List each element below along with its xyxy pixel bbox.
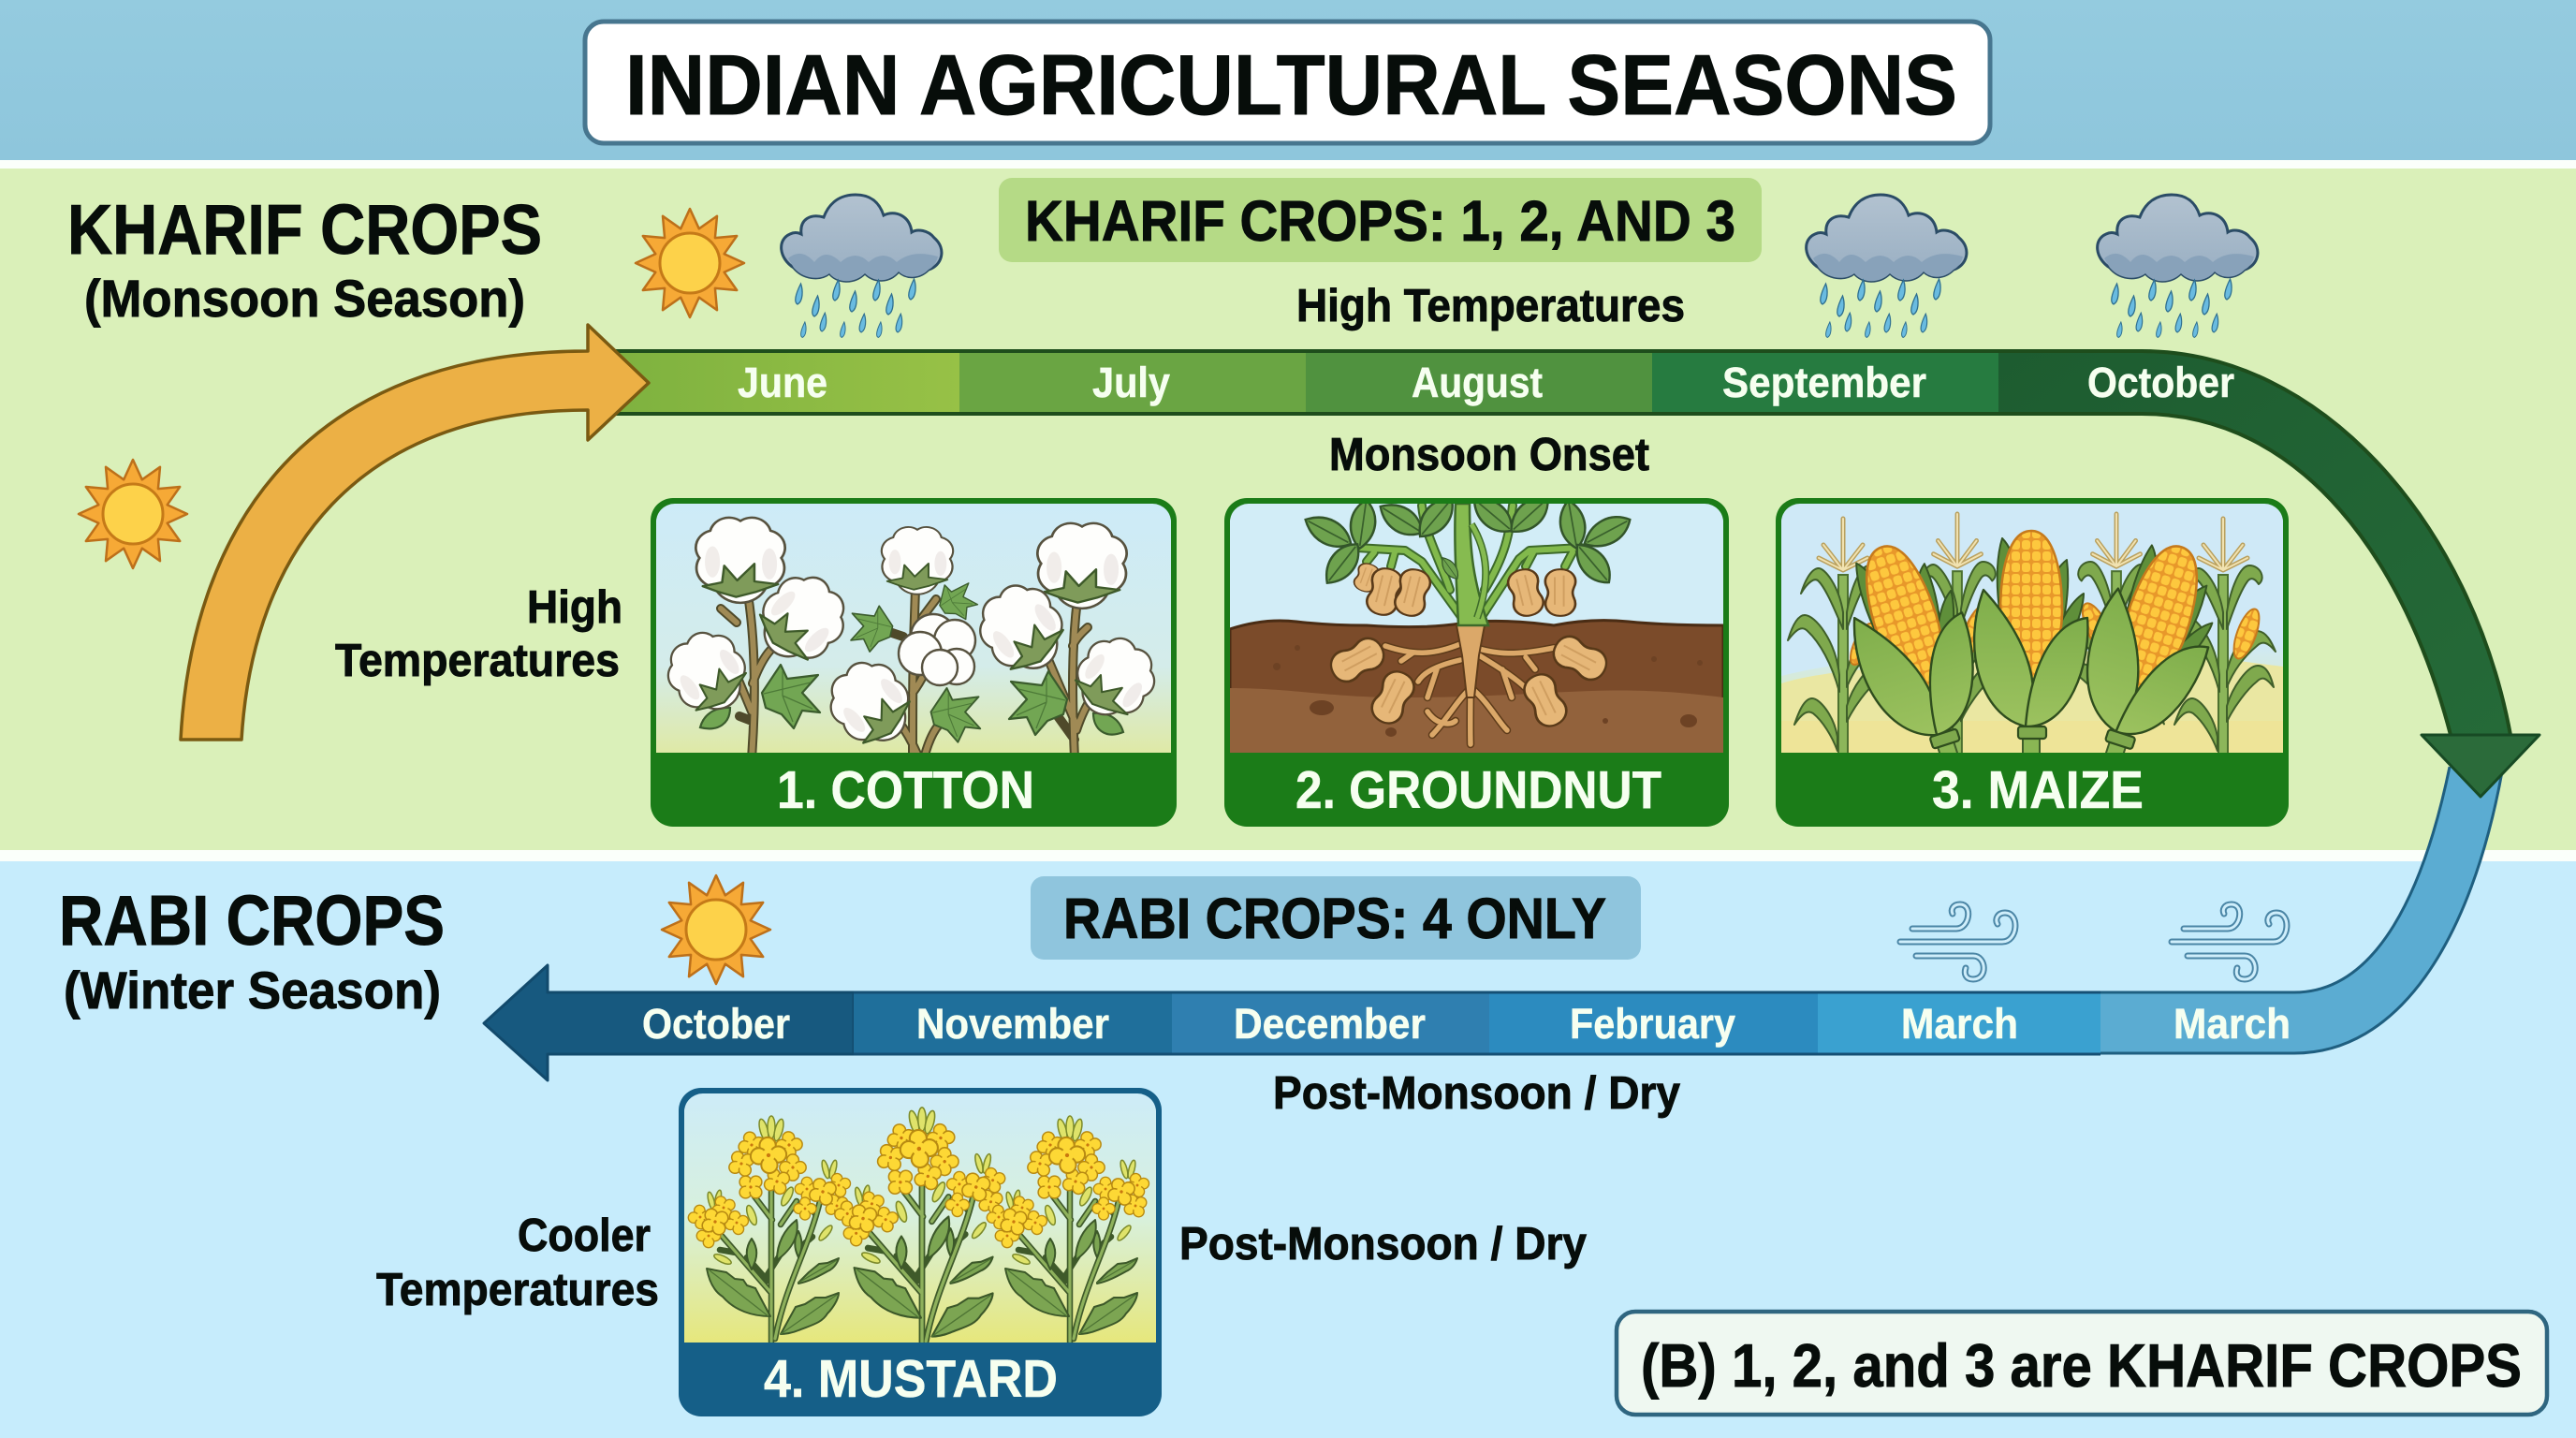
illustration: groundnut plant and roots <box>1230 490 1723 753</box>
kharif timeline band <box>599 351 2510 735</box>
illustration: mustard plants <box>686 1108 1151 1344</box>
kharif heading: (Monsoon Season) <box>84 269 525 328</box>
rabi timeline band: March <box>2174 1000 2291 1048</box>
rabi timeline band: February <box>1570 1000 1735 1048</box>
arrow: green head pointing to rabi <box>2422 735 2539 797</box>
rabi summary pill: RABI CROPS: 4 ONLY <box>1063 887 1606 950</box>
kharif heading: KHARIF CROPS <box>67 190 542 269</box>
kharif timeline band: June <box>738 359 827 406</box>
rabi timeline band: March <box>1901 1000 2018 1048</box>
kharif timeline band: July <box>1092 359 1170 406</box>
icon: rain cloud september <box>1807 195 1967 337</box>
icon: sun above october <box>662 875 770 984</box>
kharif heading <box>67 190 542 328</box>
illustration: maize plants <box>1781 511 2283 753</box>
arrow: orange season arrow <box>181 325 649 740</box>
label: post-monsoon dry card: Post-Monsoon / Dry <box>1179 1219 1587 1269</box>
rabi timeline band: November <box>916 1000 1109 1048</box>
card: cotton: 1. COTTON <box>777 760 1034 820</box>
label: cooler temperatures: Cooler <box>518 1211 651 1261</box>
panel: kharif crops background <box>0 169 2576 850</box>
icon: rain cloud june <box>782 195 942 337</box>
rabi timeline band: October <box>642 1000 790 1048</box>
card: groundnut: 2. GROUNDNUT <box>1295 760 1661 820</box>
label: high temperatures: High Temperatures <box>1296 281 1685 331</box>
blue curved connector into rabi timeline <box>2100 767 2503 1053</box>
icon: rain cloud october <box>2098 195 2258 337</box>
label: high temperatures left: High <box>527 582 622 633</box>
label: high temperatures left <box>335 582 622 686</box>
label: cooler temperatures: Temperatures <box>376 1265 659 1315</box>
card: mustard <box>679 1088 1162 1416</box>
icon: sun near june <box>636 209 744 317</box>
card: maize: 3. MAIZE <box>1932 760 2144 820</box>
card: groundnut <box>1224 490 1729 827</box>
icon: wind two <box>2172 904 2287 979</box>
label: cooler temperatures <box>376 1211 659 1315</box>
label: post-monsoon dry timeline: Post-Monsoon / Dry <box>1273 1068 1680 1119</box>
rabi heading: (Winter Season) <box>64 961 441 1020</box>
label: high temperatures left: Temperatures <box>335 636 620 686</box>
card: cotton <box>651 498 1177 827</box>
icon: sun left of arrow <box>79 460 187 568</box>
card: mustard: 4. MUSTARD <box>764 1349 1058 1409</box>
label: monsoon onset: Monsoon Onset <box>1329 430 1649 480</box>
icon: wind one <box>1900 904 2015 979</box>
illustration: cotton plants <box>655 518 1167 759</box>
panel: rabi crops background <box>0 861 2576 1438</box>
answer callout <box>1617 1312 2547 1415</box>
kharif summary pill: KHARIF CROPS: 1, 2, AND 3 <box>1025 189 1735 253</box>
rabi heading <box>59 881 445 1020</box>
card: maize <box>1776 498 2289 827</box>
kharif timeline band: August <box>1412 359 1543 406</box>
rabi timeline band <box>484 965 2291 1080</box>
rabi heading: RABI CROPS <box>59 881 445 960</box>
header band <box>0 0 2576 160</box>
title: INDIAN AGRICULTURAL SEASONS <box>625 38 1957 133</box>
kharif timeline band: October <box>2087 359 2234 406</box>
kharif timeline band: September <box>1722 359 1926 406</box>
rabi timeline band: December <box>1234 1000 1426 1048</box>
